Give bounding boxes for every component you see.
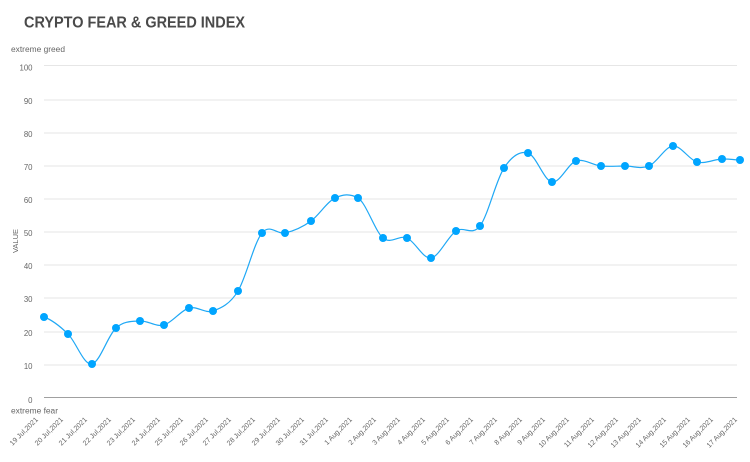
y axis labels: 10 bbox=[24, 362, 33, 371]
y axis labels: 30 bbox=[24, 295, 33, 304]
x axis date labels: 26 Jul,2021 bbox=[178, 416, 210, 447]
x axis date labels bbox=[8, 416, 739, 450]
y axis labels: 100 bbox=[19, 64, 33, 72]
x axis date labels: 2 Aug,2021 bbox=[347, 416, 378, 447]
x axis date labels: 17 Aug,2021 bbox=[705, 416, 739, 450]
y axis title: VALUE bbox=[11, 229, 20, 253]
title: CRYPTO FEAR & GREED INDEX bbox=[24, 14, 245, 32]
y axis labels: 80 bbox=[24, 130, 33, 139]
y axis labels: 90 bbox=[24, 97, 33, 106]
x axis date labels: 29 Jul,2021 bbox=[250, 416, 282, 447]
x axis date labels: 30 Jul,2021 bbox=[274, 416, 306, 447]
y axis labels: 70 bbox=[24, 163, 33, 172]
x axis date labels: 4 Aug,2021 bbox=[396, 416, 427, 447]
y axis labels: 50 bbox=[24, 229, 33, 238]
y axis labels bbox=[19, 64, 33, 405]
x axis date labels: 3 Aug,2021 bbox=[371, 416, 402, 447]
x axis date labels: 20 Jul,2021 bbox=[33, 416, 65, 447]
x axis date labels: 11 Aug,2021 bbox=[562, 416, 596, 449]
x axis date labels: 25 Jul,2021 bbox=[153, 416, 185, 447]
data points bbox=[40, 142, 744, 368]
x axis date labels: 10 Aug,2021 bbox=[537, 416, 571, 450]
y axis labels: 40 bbox=[24, 262, 33, 271]
line chart: index curve bbox=[44, 146, 740, 364]
x axis date labels: 8 Aug,2021 bbox=[493, 416, 524, 447]
bottom axis note: extreme fear: extreme fear bbox=[11, 406, 58, 416]
x axis date labels: 27 Jul,2021 bbox=[201, 416, 233, 447]
x axis date labels: 15 Aug,2021 bbox=[658, 416, 692, 450]
x axis date labels: 31 Jul,2021 bbox=[298, 416, 330, 447]
x axis date labels: 21 Jul,2021 bbox=[57, 416, 89, 447]
x axis date labels: 24 Jul,2021 bbox=[130, 416, 162, 447]
x axis date labels: 23 Jul,2021 bbox=[105, 416, 137, 447]
x axis date labels: 5 Aug,2021 bbox=[420, 416, 451, 447]
x axis date labels: 16 Aug,2021 bbox=[681, 416, 715, 450]
x axis date labels: 19 Jul,2021 bbox=[8, 416, 40, 447]
x axis date labels: 13 Aug,2021 bbox=[609, 416, 643, 450]
x axis date labels: 12 Aug,2021 bbox=[586, 416, 620, 450]
x axis line bbox=[44, 396, 737, 398]
x axis date labels: 22 Jul,2021 bbox=[81, 416, 113, 447]
x axis date labels: 6 Aug,2021 bbox=[444, 416, 475, 447]
x axis date labels: 1 Aug,2021 bbox=[323, 416, 354, 447]
y axis labels: 60 bbox=[24, 196, 33, 205]
x axis date labels: 28 Jul,2021 bbox=[225, 416, 257, 447]
x axis date labels: 7 Aug,2021 bbox=[468, 416, 499, 447]
y axis labels: 20 bbox=[24, 329, 33, 338]
top axis note: extreme greed: extreme greed bbox=[11, 45, 65, 54]
x axis date labels: 9 Aug,2021 bbox=[516, 416, 547, 447]
x axis date labels: 14 Aug,2021 bbox=[634, 416, 668, 450]
y axis labels: 0 bbox=[28, 396, 33, 405]
